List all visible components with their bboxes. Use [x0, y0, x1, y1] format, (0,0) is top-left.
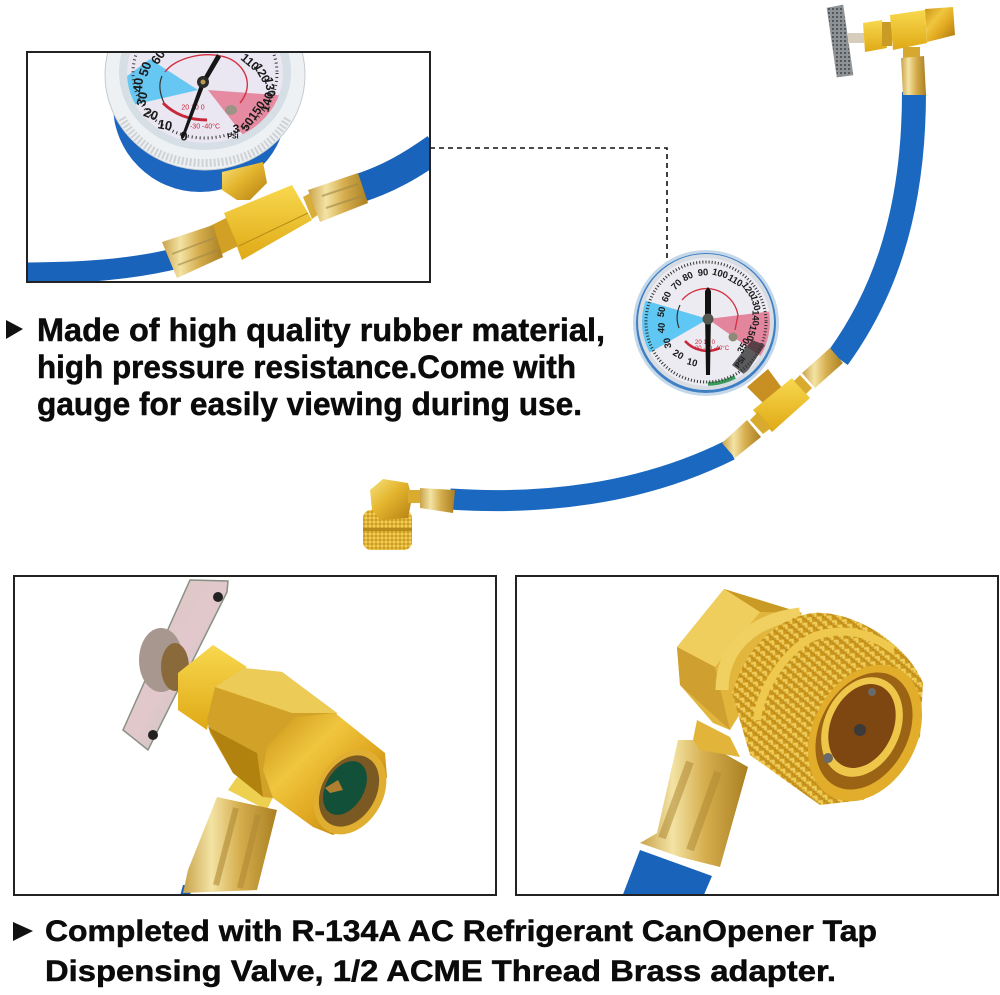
- panel: can tap valve close-up: [14, 576, 496, 896]
- panel: gauge close-up: [26, 51, 431, 283]
- valve opening: [314, 750, 386, 834]
- gauge needle: [702, 287, 714, 375]
- gauge: 30: [662, 337, 674, 349]
- hex elbow: [677, 589, 802, 730]
- brass nut under gauge: [222, 162, 267, 200]
- hose: upper section: [838, 92, 914, 358]
- hose: left segment: [20, 258, 178, 273]
- gauge: 150: [744, 324, 758, 342]
- gauge face: 60: [148, 47, 168, 67]
- gauge: 110: [726, 272, 744, 290]
- gauge face: 30: [133, 91, 151, 107]
- gauge: 130: [748, 294, 762, 312]
- quick coupler: [363, 479, 455, 550]
- gauge: 80: [681, 270, 695, 284]
- gauge: 20 10 0: [695, 340, 716, 346]
- fitting neck: [693, 720, 740, 757]
- hose stub: [180, 885, 191, 894]
- hose: right segment: [360, 148, 436, 188]
- dashed callout connector: [430, 148, 667, 262]
- blue hose: [622, 850, 712, 897]
- bullet arrow: [13, 922, 33, 941]
- bullet arrow: [6, 320, 23, 339]
- gauge face: 130: [261, 76, 279, 98]
- brass nut under gauge: [747, 369, 785, 408]
- gauge face: 3: [233, 122, 240, 136]
- bullet text 2: Dispensing Valve, 1/2 ACME Thread Brass adapter.: [45, 955, 836, 988]
- brass sleeve: [640, 740, 748, 867]
- small hex nut: [178, 645, 247, 730]
- valve hex body: [207, 668, 337, 798]
- knurled collar: [732, 613, 923, 805]
- gauge: 20: [671, 348, 685, 362]
- gauge: 40: [656, 322, 668, 334]
- gauge face: 0: [180, 128, 188, 144]
- gauge housing: [114, 114, 281, 192]
- bullet text 1: high pressure resistance.Come with: [37, 349, 576, 385]
- gauge face: 120: [251, 61, 273, 85]
- gauge: -20 -30 -40°C: [693, 346, 730, 352]
- valve cylinder: [263, 713, 387, 835]
- gauge: 70: [669, 277, 685, 293]
- brass tee block: [210, 185, 322, 260]
- panel: quick coupler close-up: [516, 576, 998, 897]
- gauge face: PSI: [227, 134, 239, 140]
- gauge: 50: [656, 306, 668, 318]
- brass tee and fittings: [722, 348, 843, 458]
- gauge: 60: [660, 290, 674, 304]
- gauge face: 50150: [238, 98, 268, 134]
- brass hose sleeve: right: [308, 173, 368, 222]
- brass hose sleeve: left: [162, 225, 223, 278]
- coupler opening: [808, 664, 922, 802]
- brass sleeve: [183, 797, 277, 893]
- gauge face: [127, 53, 283, 143]
- gauge face: 10: [157, 116, 173, 134]
- gauge: 90: [697, 267, 709, 279]
- bullet text 1: [6, 312, 605, 422]
- gauge face: 20: [141, 104, 161, 124]
- gauge face: 40: [130, 77, 146, 93]
- gauge face: 50: [135, 60, 155, 78]
- gauge face: 20 10 0: [181, 104, 205, 112]
- gauge: 10: [685, 356, 699, 370]
- gauge: [633, 250, 779, 396]
- can tap valve: [827, 5, 955, 95]
- hose: lower section: [450, 450, 730, 501]
- gauge needle: [181, 54, 221, 138]
- gauge: 140: [750, 310, 760, 326]
- gauge bezel: [104, 53, 306, 170]
- gauge: 350: [735, 336, 753, 356]
- gauge: 100: [711, 267, 729, 281]
- bullet text 1: gauge for easily viewing during use.: [37, 386, 582, 422]
- gauge face: 140: [258, 90, 276, 113]
- gauge face: 110: [238, 50, 262, 74]
- bullet text 2: [13, 915, 877, 988]
- gauge: PSI: [733, 354, 747, 370]
- bullet text 2: Completed with R-134A AC Refrigerant CanOpener Tap: [45, 915, 877, 948]
- gauge: 120: [739, 280, 757, 300]
- gauge face: -30 -40°C: [190, 122, 220, 130]
- fitting neck: [228, 777, 273, 810]
- bullet text 1: Made of high quality rubber material,: [37, 312, 605, 348]
- T handle: [123, 580, 228, 750]
- product: charging hose with gauge: [363, 5, 955, 550]
